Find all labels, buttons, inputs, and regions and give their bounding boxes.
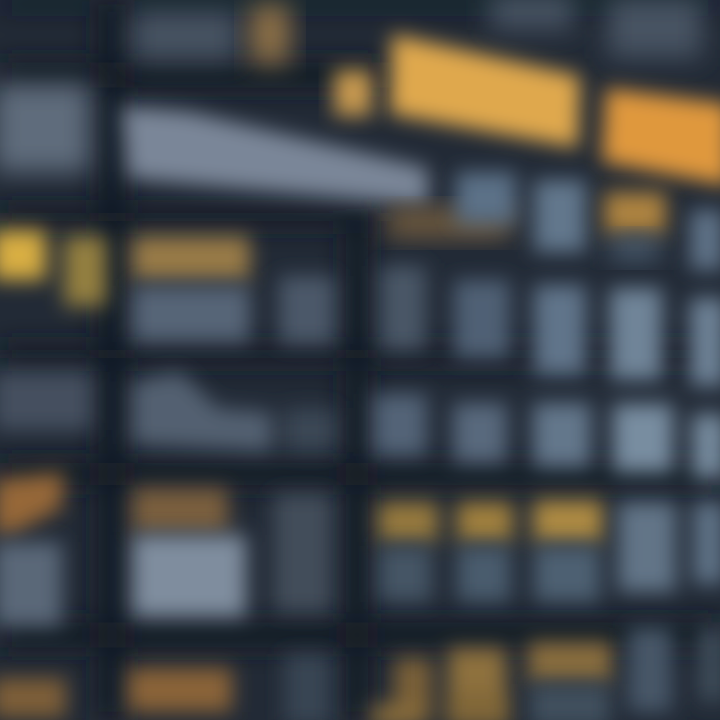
slate under orange — [610, 236, 660, 260]
top gray cells — [132, 0, 702, 60]
small orange cell — [334, 70, 372, 116]
slate cells — [284, 628, 720, 720]
orange cell — [604, 192, 666, 234]
yellow cells — [0, 230, 106, 306]
left gray cell — [0, 84, 90, 172]
slate cells — [456, 172, 720, 270]
dim orange strip — [386, 208, 510, 238]
large orange cell — [390, 34, 580, 148]
orange label cells — [0, 472, 603, 542]
slate cells — [132, 266, 720, 386]
row 5 — [0, 472, 720, 626]
tan heading cell — [132, 236, 250, 280]
tan cell — [250, 4, 290, 64]
slate cells — [0, 372, 720, 478]
row 2: light header strip — [0, 84, 720, 270]
sloped light strip — [122, 106, 428, 206]
slate value cells — [0, 494, 720, 626]
row 1: top cells with orange highlights — [132, 0, 720, 186]
row 4 — [0, 372, 720, 478]
row 6 — [0, 628, 720, 720]
right orange cell — [602, 88, 720, 186]
row 3 — [0, 230, 720, 386]
orange label cells — [0, 642, 612, 720]
